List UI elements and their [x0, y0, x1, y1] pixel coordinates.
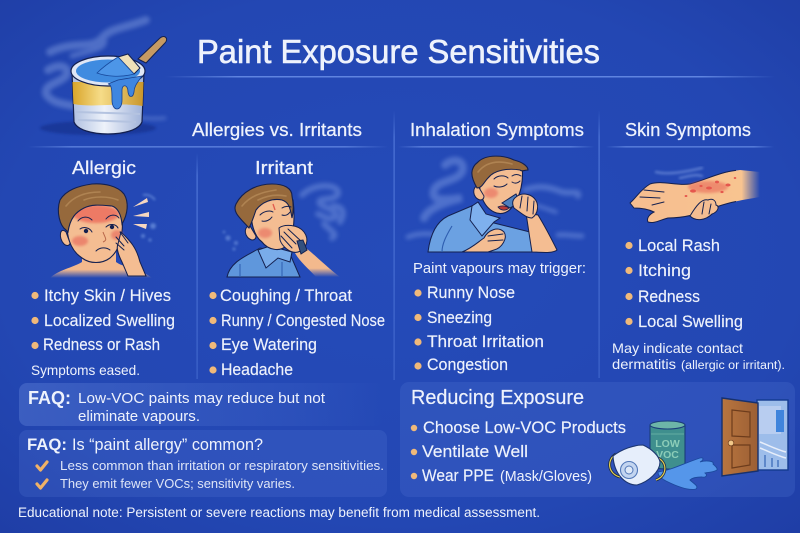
list: skin symptoms: Itching — [638, 262, 691, 280]
list: allergic symptoms: Symptoms eased. — [31, 362, 140, 378]
icon: respirator mask — [610, 445, 665, 485]
title: Paint Exposure Sensitivities — [197, 33, 600, 70]
panel: irritant — [209, 158, 385, 379]
icon: paint can with brush — [40, 20, 167, 135]
heading: Allergic: Allergic — [72, 158, 136, 178]
list: skin symptoms: Local Swelling — [638, 313, 743, 331]
panel: FAQ paint allergy — [19, 430, 387, 497]
icon: man covering nose — [408, 156, 582, 252]
list: reduction steps: Choose Low-VOC Products — [423, 419, 626, 437]
heading: Reducing Exposure: Reducing Exposure — [411, 387, 584, 409]
list: reduction steps: (Mask/Gloves) — [500, 469, 592, 485]
list: allergic symptoms: Localized Swelling — [44, 312, 175, 330]
icon: open door with window — [722, 398, 788, 476]
panel: skin symptoms — [612, 168, 785, 372]
icon: check — [37, 480, 47, 488]
heading: Skin Symptoms: Skin Symptoms — [625, 120, 751, 140]
list: inhalation symptoms: Sneezing — [427, 309, 492, 327]
list: inhalation symptoms — [414, 284, 544, 374]
list: allergic symptoms: Itchy Skin / Hives — [44, 287, 171, 305]
brush — [97, 37, 167, 76]
panel: FAQ low-VOC: FAQ: — [28, 388, 71, 408]
text: vapours intro: Paint vapours may trigger: — [413, 261, 586, 277]
heading: Inhalation Symptoms: Inhalation Symptoms — [410, 120, 584, 140]
list: irritant symptoms: Runny / Congested Nose — [221, 312, 385, 330]
list: reduction steps — [411, 419, 626, 485]
panel: FAQ paint allergy: Is “paint allergy” common? — [72, 436, 263, 454]
list: inhalation symptoms: Runny Nose — [427, 284, 515, 302]
list: allergic symptoms — [31, 287, 175, 378]
list: skin symptoms: Local Rash — [638, 237, 720, 255]
icon: low-VOC can: LOW — [655, 438, 680, 450]
icon: gloves — [658, 458, 717, 489]
text: dermatitis note — [612, 340, 785, 372]
panel: reducing exposure — [400, 382, 795, 497]
icon: low-VOC can: VOC — [656, 449, 679, 461]
panel: FAQ paint allergy: Less common than irritation or respiratory sensitivities. — [60, 459, 384, 473]
panel: FAQ paint allergy: FAQ: — [27, 435, 67, 454]
list: skin symptoms — [625, 237, 743, 331]
list: inhalation symptoms: Throat Irritation — [427, 333, 544, 351]
icon: check — [37, 462, 47, 470]
panel: FAQ low-VOC: Low-VOC paints may reduce but not — [78, 390, 326, 407]
icon: arm with rash — [630, 168, 760, 223]
list: irritant symptoms: Eye Watering — [221, 336, 317, 354]
text: dermatitis note: May indicate contact — [612, 340, 743, 356]
heading: Irritant: Irritant — [255, 158, 313, 178]
list: allergic symptoms: Redness or Rash — [43, 336, 160, 354]
fist and inhaler — [279, 225, 307, 252]
list: irritant symptoms: Headache — [221, 361, 293, 379]
list: irritant symptoms — [209, 287, 385, 379]
heading: Allergies vs. Irritants: Allergies vs. Irritants — [192, 120, 362, 140]
icon: itch rays — [133, 198, 149, 229]
icon: low-VOC can — [650, 421, 685, 469]
text: dermatitis note: dermatitis — [612, 356, 676, 372]
icon: coughing man — [223, 184, 343, 277]
icon: man with itchy red skin — [50, 184, 156, 278]
panel: FAQ paint allergy: They emit fewer VOCs; sensitivity varies. — [60, 477, 295, 491]
list: skin symptoms: Redness — [638, 288, 700, 306]
list: reduction steps: Wear PPE — [422, 467, 494, 485]
panel: allergic — [31, 158, 175, 378]
list: irritant symptoms: Coughing / Throat — [220, 287, 352, 305]
list: inhalation symptoms: Congestion — [427, 356, 508, 374]
panel: FAQ low-VOC — [19, 383, 384, 426]
footer note: Educational note: Persistent or severe reactions may benefit from medical assessment. — [18, 505, 540, 520]
list: reduction steps: Ventilate Well — [422, 443, 528, 461]
panel: FAQ low-VOC: eliminate vapours. — [78, 408, 200, 425]
panel: inhalation symptoms — [408, 156, 586, 374]
text: dermatitis note: (allergic or irritant). — [681, 360, 785, 372]
